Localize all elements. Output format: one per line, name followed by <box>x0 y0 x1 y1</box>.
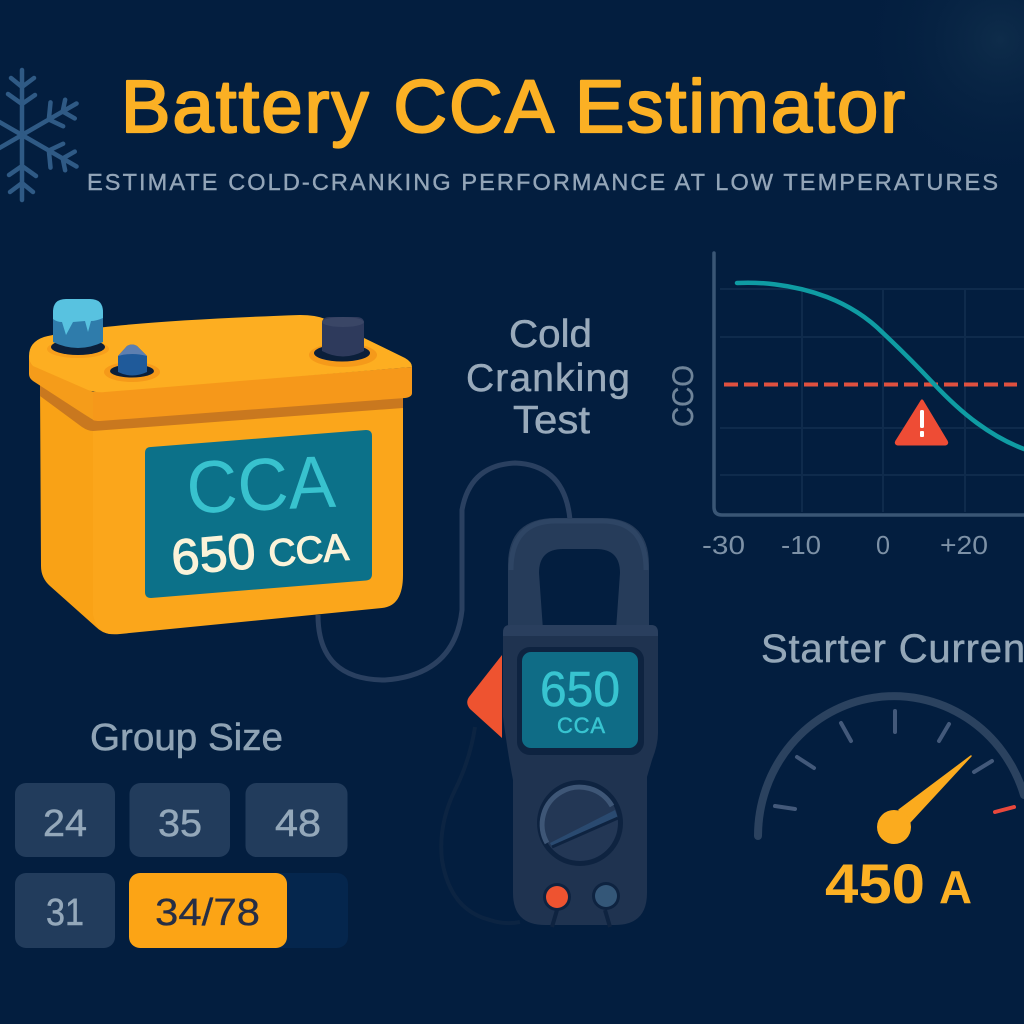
size button 48: 48 <box>275 803 321 845</box>
battery front <box>93 402 403 634</box>
empty slot <box>270 873 348 948</box>
gauge ticks <box>775 711 992 809</box>
cold cranking test label: Test <box>513 399 590 442</box>
subtitle: ESTIMATE COLD-CRANKING PERFORMANCE AT LOW TEMPERATURES <box>87 169 998 195</box>
chart axes <box>714 253 1024 515</box>
clamp meter <box>441 518 658 927</box>
cold cranking test label <box>466 313 630 442</box>
x axis labels <box>702 530 988 560</box>
display: 650 <box>540 663 620 717</box>
size button 35 <box>130 783 230 857</box>
x axis labels: -10 <box>781 530 821 560</box>
threshold line <box>724 382 1017 386</box>
CCA label panel <box>145 430 372 598</box>
x axis labels: +20 <box>940 530 988 560</box>
orange trigger <box>467 655 502 738</box>
battery dark band <box>40 384 403 431</box>
gauge red tick <box>995 807 1014 812</box>
size button 31: 31 <box>46 892 84 934</box>
group size panel <box>15 717 348 948</box>
small terminal <box>104 344 160 382</box>
battery lid top <box>29 315 412 392</box>
icy terminal <box>47 299 109 358</box>
gauge arc <box>758 696 1024 836</box>
size button 48 <box>246 783 348 857</box>
x axis labels: 0 <box>876 530 890 560</box>
display: CCA <box>557 713 605 738</box>
jaw highlight <box>511 521 646 570</box>
battery illustration <box>29 299 412 634</box>
blue port <box>592 882 620 927</box>
starter current gauge <box>758 696 1024 915</box>
battery left side <box>40 385 110 634</box>
CCA label panel: 650 <box>169 523 258 586</box>
chart grid <box>720 289 1024 512</box>
clamp jaw <box>508 518 649 630</box>
CCA curve <box>737 283 1024 449</box>
icon: snowflake <box>0 70 83 200</box>
title: Battery CCA Estimator <box>121 65 905 148</box>
size button 24: 24 <box>43 803 87 845</box>
gauge value: A <box>939 861 972 913</box>
dial <box>537 780 623 866</box>
body top strip <box>503 625 658 636</box>
dark terminal <box>309 317 377 367</box>
x axis labels: -30 <box>702 530 745 560</box>
CCA label panel: CCA <box>267 527 351 576</box>
group size heading: Group Size <box>90 717 283 759</box>
gauge value <box>825 852 972 915</box>
red port <box>543 883 571 927</box>
size button 24 <box>15 783 115 857</box>
probe wire left <box>441 727 520 923</box>
size button 34/78 selected <box>129 873 287 948</box>
display <box>517 647 644 755</box>
warning icon <box>896 401 947 444</box>
meter body <box>503 625 658 925</box>
cable from battery to meter <box>318 463 570 680</box>
line chart <box>667 253 1024 560</box>
size button 31 <box>15 873 115 948</box>
cold cranking test label: Cranking <box>466 357 630 400</box>
cold cranking test label: Cold <box>509 313 592 356</box>
battery lid side <box>29 356 93 420</box>
cco axis label: CCO <box>667 365 700 427</box>
gauge needle <box>899 756 971 822</box>
gauge hub <box>877 810 911 844</box>
size button 34/78 selected: 34/78 <box>155 892 260 934</box>
gauge value: 450 <box>825 852 925 915</box>
CCA label panel: CCA <box>185 440 338 529</box>
size button 35: 35 <box>158 803 202 845</box>
battery lid front <box>93 367 412 421</box>
